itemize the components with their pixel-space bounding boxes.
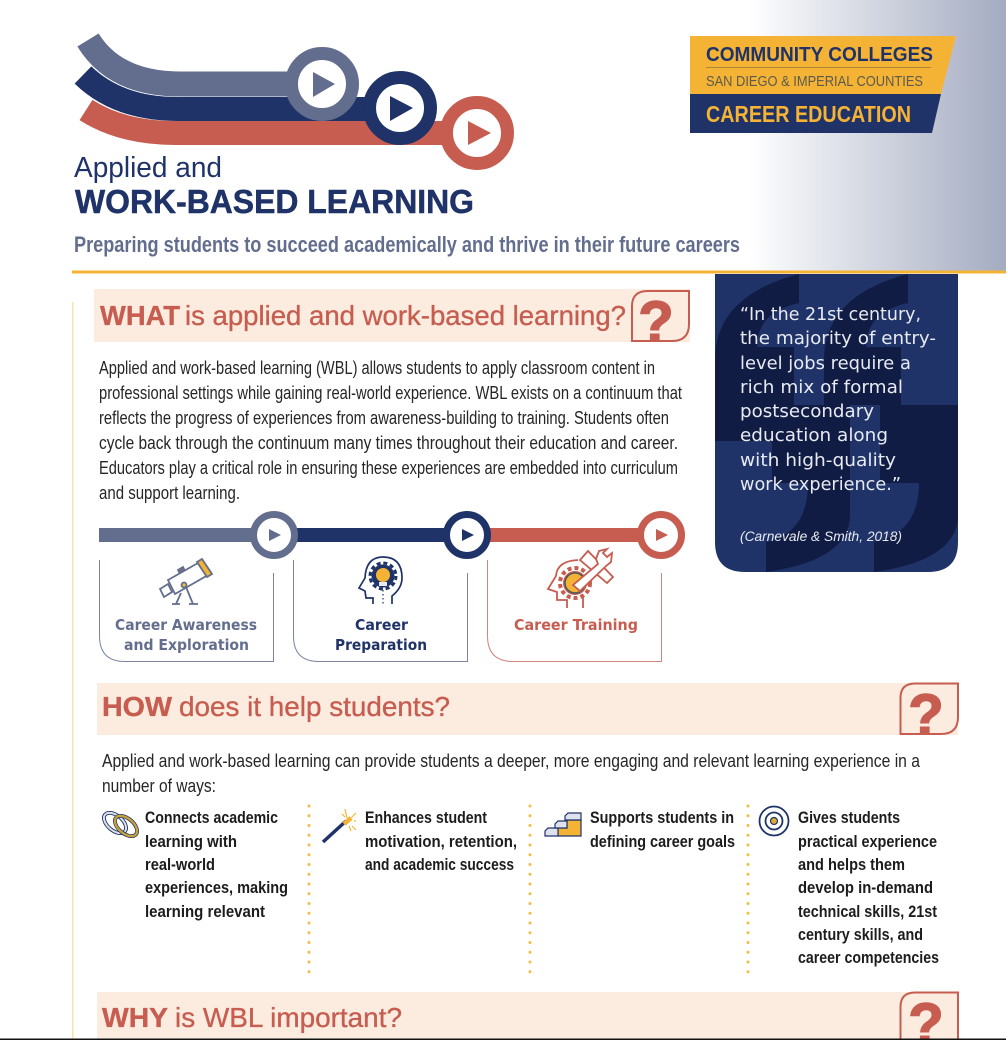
icon: question box: ? <box>908 683 944 748</box>
text: practical experience <box>798 832 937 851</box>
label: and Exploration <box>124 636 249 654</box>
play button: preparation <box>446 514 488 556</box>
card: career training <box>488 549 662 662</box>
label: Career Awareness <box>115 616 257 634</box>
continuum timeline <box>99 514 682 556</box>
text: career competencies <box>798 948 939 967</box>
heading: how <box>97 682 959 735</box>
text: Gives students <box>798 808 900 827</box>
logo: community colleges career education: CAREER EDUCATION <box>706 101 911 127</box>
play button: awareness <box>254 514 294 556</box>
icon: question box <box>900 682 959 735</box>
play button: training <box>640 514 682 556</box>
icon: telescope <box>160 559 212 604</box>
label <box>335 616 427 654</box>
column: enhances <box>323 808 517 874</box>
swoosh: navy <box>83 75 430 138</box>
label <box>115 616 257 654</box>
quote text: rich mix of formal <box>740 377 903 398</box>
text: real-world <box>145 855 215 874</box>
label: Career Training <box>514 616 638 634</box>
quote text: education along <box>740 425 888 446</box>
card: career awareness <box>100 559 274 662</box>
text: and helps them <box>798 855 905 874</box>
column: gives <box>760 806 939 967</box>
gold rule <box>72 270 1006 274</box>
text: century skills, and <box>798 925 923 944</box>
heading: why: WHY <box>102 1002 168 1033</box>
text: learning relevant <box>145 902 265 921</box>
heading: why: is WBL important? <box>175 1002 402 1033</box>
icon: head with gear and wrench <box>548 549 613 608</box>
logo: community colleges career education: SAN DIEGO & IMPERIAL COUNTIES <box>706 74 923 90</box>
swoosh: slate <box>88 40 352 114</box>
quote text <box>740 304 936 495</box>
text: motivation, retention, <box>365 832 517 851</box>
text block: what description: Applied and work-based learning (WBL) allows students to apply classroom content in <box>99 358 655 378</box>
text: Enhances student <box>365 808 487 827</box>
quote text: level jobs require a <box>740 353 911 374</box>
icon: stairs <box>545 813 581 836</box>
text block: what description: professional settings while gaining real-world experience. WBL exists on a continuum that <box>99 383 682 403</box>
text: technical skills, 21st <box>798 902 937 921</box>
swoosh: coral <box>86 102 508 164</box>
text: learning with <box>145 832 237 851</box>
quote marks background <box>715 274 958 572</box>
quote text: work experience.” <box>740 474 901 495</box>
quote text: postsecondary <box>740 401 874 422</box>
column: connects <box>100 808 288 921</box>
logo: community colleges career education <box>690 36 956 133</box>
heading: why <box>97 992 958 1040</box>
title: Applied and <box>74 152 222 184</box>
text block: what description: reflects the progress of experiences from awareness-building to training. Students often <box>99 408 669 428</box>
text: Supports students in <box>590 808 734 827</box>
text block: what description: Educators play a critical role in ensuring these experiences are embedded into curriculum <box>99 458 678 478</box>
logo: community colleges career education: COMMUNITY COLLEGES <box>706 44 933 66</box>
icon: question box <box>900 992 958 1040</box>
card: career preparation <box>294 557 468 662</box>
text: experiences, making <box>145 878 288 897</box>
title: WORK-BASED LEARNING <box>75 183 474 220</box>
text block: what description <box>99 358 682 503</box>
header gradient background <box>750 0 1006 271</box>
icon: magic wand <box>323 809 356 842</box>
text: develop in-demand <box>798 878 933 897</box>
icon: question box <box>631 290 690 342</box>
quote text: “In the 21st century, <box>740 304 921 325</box>
text block: what description: cycle back through the continuum many times throughout their education and career. <box>99 433 678 453</box>
label: Preparation <box>335 636 427 654</box>
text <box>145 808 288 921</box>
icon: target <box>760 806 788 836</box>
heading: how: HOW <box>102 691 173 722</box>
text: Connects academic <box>145 808 278 827</box>
panel: quote <box>715 274 958 572</box>
icon: chain links <box>100 809 141 840</box>
icon: question box: ? <box>638 290 674 355</box>
heading: how: does it help students? <box>179 691 450 722</box>
text <box>798 808 939 967</box>
label: Career <box>355 616 409 634</box>
text block: what description: and support learning. <box>99 483 240 503</box>
quote citation: (Carnevale & Smith, 2018) <box>740 529 902 544</box>
heading: what: WHAT <box>100 300 180 331</box>
text <box>365 808 517 874</box>
quote text: the majority of entry- <box>740 328 936 349</box>
heading: what <box>94 289 690 342</box>
subtitle: Preparing students to succeed academically and thrive in their future careers <box>74 232 740 257</box>
text block: how intro: number of ways: <box>102 776 216 796</box>
quote text: with high-quality <box>740 450 896 471</box>
title <box>74 152 474 220</box>
text: and academic success <box>365 855 514 874</box>
text: defining career goals <box>590 832 735 851</box>
header graphic: three swooshes with play buttons <box>83 40 508 164</box>
icon: head with lightbulb gear <box>359 557 402 604</box>
text <box>590 808 735 851</box>
text block: how intro <box>102 751 921 796</box>
heading: what: is applied and work-based learning? <box>185 300 626 331</box>
column: supports <box>545 808 735 851</box>
